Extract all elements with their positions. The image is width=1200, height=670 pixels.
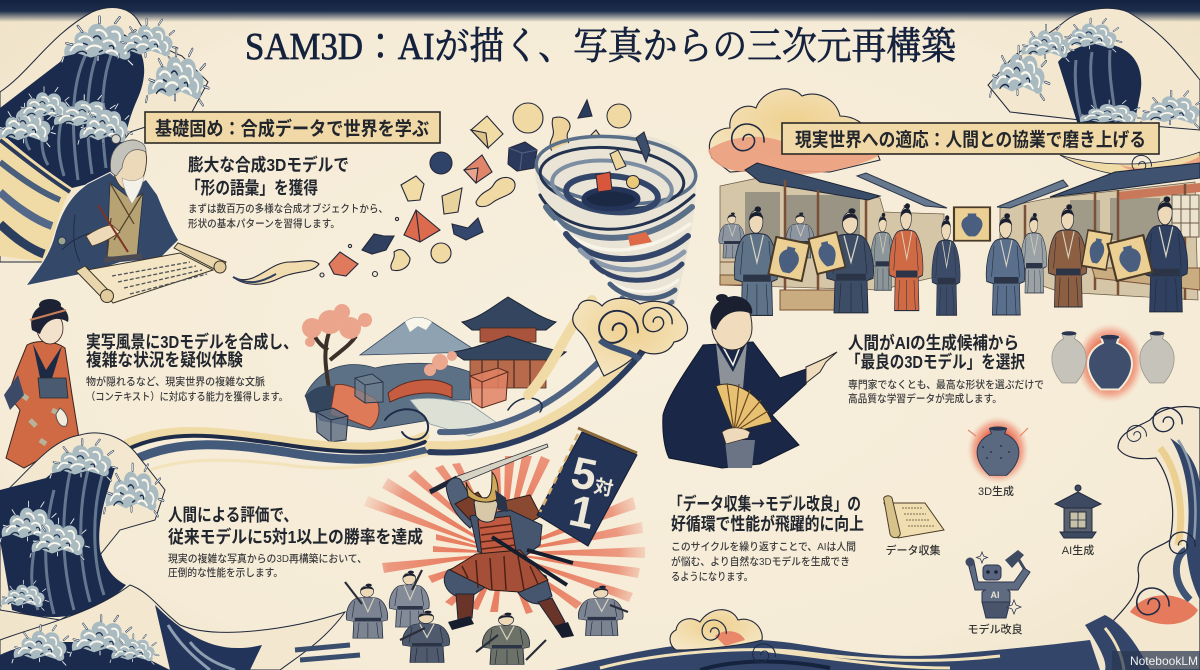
head and helmet <box>474 498 498 522</box>
illustration: man with fan <box>663 294 837 468</box>
banner: 5 to 1: 対 <box>592 475 615 501</box>
person 2 <box>826 208 874 313</box>
text: composite scenes: 物が隠れるなど、現実世界の複雑な文脈 <box>86 375 265 388</box>
flying 3D objects <box>233 100 606 284</box>
illustration: samurai <box>430 444 574 638</box>
man in striped robe <box>1142 196 1188 312</box>
banner: 5 to 1 <box>537 428 637 546</box>
icon: robot with hammer <box>966 550 1030 618</box>
scroll <box>76 243 226 303</box>
text: win rate <box>168 505 423 579</box>
right buildings <box>1000 182 1198 300</box>
mountain <box>360 318 478 355</box>
sword <box>455 444 548 484</box>
navy sphere <box>430 152 452 174</box>
text: virtuous cycle: るようになります。 <box>671 571 753 583</box>
text: win rate: 人間による評価で、 <box>168 505 298 525</box>
navy cube <box>508 142 537 171</box>
illustration: market scene <box>719 163 1200 315</box>
watermark <box>1112 651 1200 670</box>
text: synthetic models: 「形の語彙」を獲得 <box>186 178 318 198</box>
text: composite scenes <box>86 332 298 403</box>
arm and brush <box>86 225 120 246</box>
top navy band <box>0 0 1200 22</box>
raised arm <box>446 478 480 528</box>
red pyramid <box>404 210 440 242</box>
text: win rate: 従来モデルに5対1以上の勝率を達成 <box>168 527 423 547</box>
label: data collection: データ収集 <box>886 543 940 557</box>
jar frames <box>768 237 810 281</box>
text: synthetic models <box>186 155 388 230</box>
watermark: NotebookLM <box>1130 654 1198 668</box>
person 1 <box>734 206 778 315</box>
legs <box>444 560 552 604</box>
glass cube upper <box>355 374 383 403</box>
banner: 5 to 1: 5 <box>567 448 601 501</box>
pointing hand <box>806 352 837 383</box>
text: human selection: 専門家でなくとも、最高な形状を選ぶだけで <box>848 378 1044 391</box>
text: synthetic models: 形状の基本パターンを習得します。 <box>188 217 340 230</box>
skirt armour <box>450 550 548 592</box>
text: composite scenes: 実写風景に3Dモデルを合成し、 <box>86 332 298 352</box>
cream blob lower <box>476 177 515 207</box>
blossom branch <box>424 351 457 376</box>
scabbards <box>492 537 573 585</box>
minions <box>345 570 628 664</box>
heading: foundation <box>145 112 440 143</box>
cream blob <box>550 117 570 156</box>
text: virtuous cycle <box>669 491 864 583</box>
river <box>410 398 500 436</box>
text: synthetic models: まずは数百万の多様な合成オブジェクトから、 <box>188 202 388 215</box>
wave: right side <box>1085 406 1200 670</box>
wave: bottom left <box>0 585 360 670</box>
rocks <box>330 384 379 428</box>
woman in red <box>889 203 923 311</box>
tornado <box>533 104 699 333</box>
label: model improvement: モデル改良 <box>968 622 1022 636</box>
text: virtuous cycle: 好循環で性能が飛躍的に向上 <box>671 514 864 534</box>
cream sphere lower <box>431 243 451 263</box>
objects in funnel <box>596 172 612 192</box>
icon: robot with hammer: AI <box>990 590 1000 600</box>
navy bent block <box>452 218 483 240</box>
illustration: sage with scroll <box>27 134 226 303</box>
heading: real world: 現実世界への適応：人間との協業で磨き上げる <box>795 129 1146 151</box>
icon: scroll for data collection <box>884 496 944 538</box>
head <box>112 140 146 190</box>
text: human selection: 「最良の3Dモデル」を選択 <box>846 352 1025 372</box>
swoosh <box>233 261 319 284</box>
background people <box>719 213 745 258</box>
text: synthetic models: 膨大な合成3Dモデルで <box>188 155 349 175</box>
red bridge <box>388 380 452 402</box>
chest armour <box>478 516 516 556</box>
flowing wave band <box>126 300 650 470</box>
text: virtuous cycle: が悩む、より自然な3Dモデルを生成でき <box>671 555 850 568</box>
text: win rate: 現実の複雑な写真からの3D再構築において、 <box>168 552 367 565</box>
text: virtuous cycle: このサイクルを繰り返すことで、AIは人間 <box>671 540 856 553</box>
text: win rate: 圧倒的な性能を示します。 <box>168 566 283 579</box>
text: virtuous cycle: 「データ収集→モデル改良」の <box>669 491 861 516</box>
cream cube <box>471 116 503 148</box>
cloud swirl: middle <box>573 298 688 376</box>
pagoda <box>452 297 566 388</box>
orange glass box <box>470 368 508 408</box>
text: human selection: 人間がAIの生成候補から <box>848 333 1019 353</box>
text: human selection <box>846 333 1044 405</box>
cream cube left <box>401 176 424 201</box>
cream sphere <box>513 103 543 133</box>
child <box>932 215 960 315</box>
illustration: landscape with composited objects <box>302 297 566 442</box>
torso sleeves <box>470 510 542 560</box>
man with frame <box>986 213 1025 315</box>
navy shard left <box>362 234 394 254</box>
heading: real world <box>782 123 1159 154</box>
fan <box>716 384 772 432</box>
head <box>712 300 752 350</box>
title: SAM3D：AIが描く、写真からの三次元再構築 <box>245 26 956 68</box>
cream blob small <box>391 250 410 270</box>
wave: top right <box>988 8 1200 130</box>
icon: candidate jars <box>1052 323 1174 403</box>
feet <box>448 616 574 638</box>
icon: lantern <box>1055 485 1101 538</box>
banner: 5 to 1: 1 <box>565 486 599 539</box>
heading: foundation: 基礎固め：合成データで世界を学ぶ <box>155 117 429 140</box>
glass cube lower <box>316 408 348 442</box>
left buildings <box>720 178 944 290</box>
man in brown <box>1048 204 1087 307</box>
foliage <box>305 386 350 420</box>
cream shard <box>442 188 462 214</box>
back plates <box>500 495 541 528</box>
red cube lower <box>329 252 358 276</box>
wave: bottom right band <box>555 610 1100 670</box>
orange cube <box>464 155 492 183</box>
blossom tree <box>312 330 356 395</box>
wave: lower left <box>0 433 165 620</box>
wave: top left <box>0 8 209 262</box>
cream cube right <box>584 130 606 156</box>
hills <box>305 363 470 430</box>
icon: 3D generation jar <box>967 416 1029 484</box>
label: AI generation: AI生成 <box>1062 543 1094 557</box>
text: human selection: 高品質な学習データが完成します。 <box>848 392 1002 405</box>
text: composite scenes: （コンテキスト）に対応する能力を獲得します。 <box>86 390 288 403</box>
sun rays <box>364 456 645 614</box>
text: composite scenes: 複雑な状況を疑似体験 <box>86 350 243 370</box>
label: 3D generation: 3D生成 <box>978 484 1014 498</box>
small particles <box>320 164 552 277</box>
navy shard <box>578 100 592 118</box>
robe <box>27 173 178 285</box>
cloud: market top <box>708 89 1200 178</box>
illustration: kimono woman <box>4 299 79 468</box>
